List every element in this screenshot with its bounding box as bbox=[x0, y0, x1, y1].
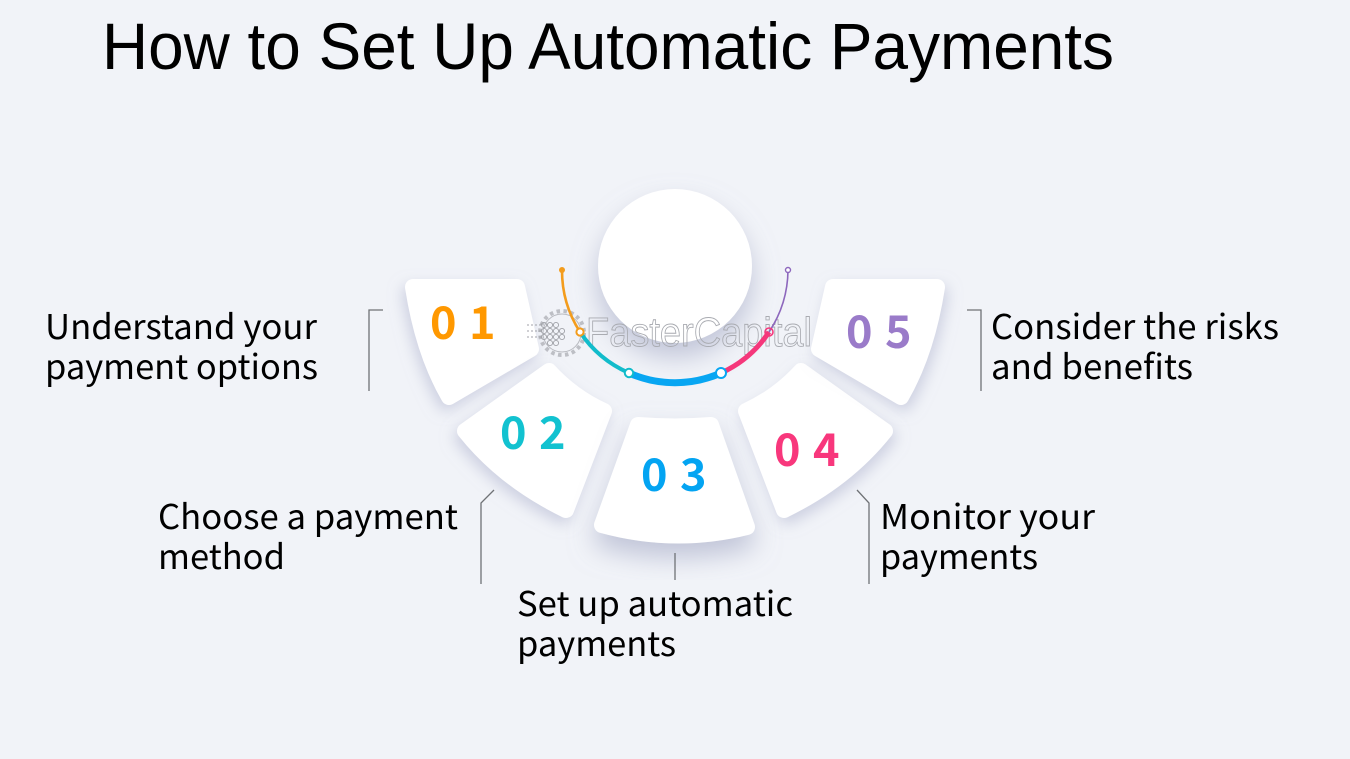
card 03: 0 bbox=[641, 439, 668, 504]
center circle bbox=[598, 189, 752, 343]
card 04: 4 bbox=[813, 414, 840, 479]
card 05 bbox=[819, 287, 937, 397]
label 01: Understand your payment options: Understand your bbox=[45, 300, 318, 349]
card 03: 3 bbox=[680, 439, 707, 504]
card 05: 5 bbox=[885, 296, 912, 361]
card 01: 0 bbox=[430, 287, 457, 352]
card 05: 0 bbox=[846, 296, 873, 361]
label 03: Set up automatic payments: payments bbox=[517, 617, 676, 666]
connector 01 bbox=[369, 310, 383, 391]
label 05: Consider the risks and benefits bbox=[991, 300, 1279, 389]
label 02: Choose a payment method: Choose a payment bbox=[158, 490, 458, 539]
label 04: Monitor your payments: Monitor your bbox=[880, 490, 1096, 539]
card 02 bbox=[465, 371, 604, 510]
card 03 bbox=[602, 425, 747, 536]
label 02: Choose a payment method bbox=[158, 490, 458, 579]
label 01: Understand your payment options bbox=[45, 300, 318, 389]
connector 04 bbox=[857, 490, 869, 584]
card 04: 0 bbox=[774, 414, 801, 479]
card 01 bbox=[413, 287, 531, 397]
card 02: 0 bbox=[500, 397, 527, 462]
connector 05 bbox=[967, 310, 981, 391]
label 05: Consider the risks and benefits: Consider the risks bbox=[991, 300, 1279, 349]
title: How to Set Up Automatic Payments bbox=[102, 9, 1114, 83]
label 05: Consider the risks and benefits: and benefits bbox=[991, 340, 1193, 389]
card 01: 1 bbox=[469, 287, 496, 352]
timeline arc bbox=[559, 267, 790, 383]
label 04: Monitor your payments bbox=[880, 490, 1096, 579]
label 01: Understand your payment options: payment options bbox=[45, 340, 318, 389]
watermark: FasterCapital logo: FasterCapital bbox=[586, 309, 812, 355]
card 02: 2 bbox=[539, 397, 566, 462]
label 03: Set up automatic payments bbox=[517, 577, 793, 666]
connector 03 bbox=[674, 553, 676, 580]
card 04 bbox=[746, 371, 885, 510]
label 03: Set up automatic payments: Set up automatic bbox=[517, 577, 793, 626]
label 04: Monitor your payments: payments bbox=[880, 530, 1038, 579]
connector 02 bbox=[481, 490, 494, 584]
label 02: Choose a payment method: method bbox=[158, 530, 285, 579]
